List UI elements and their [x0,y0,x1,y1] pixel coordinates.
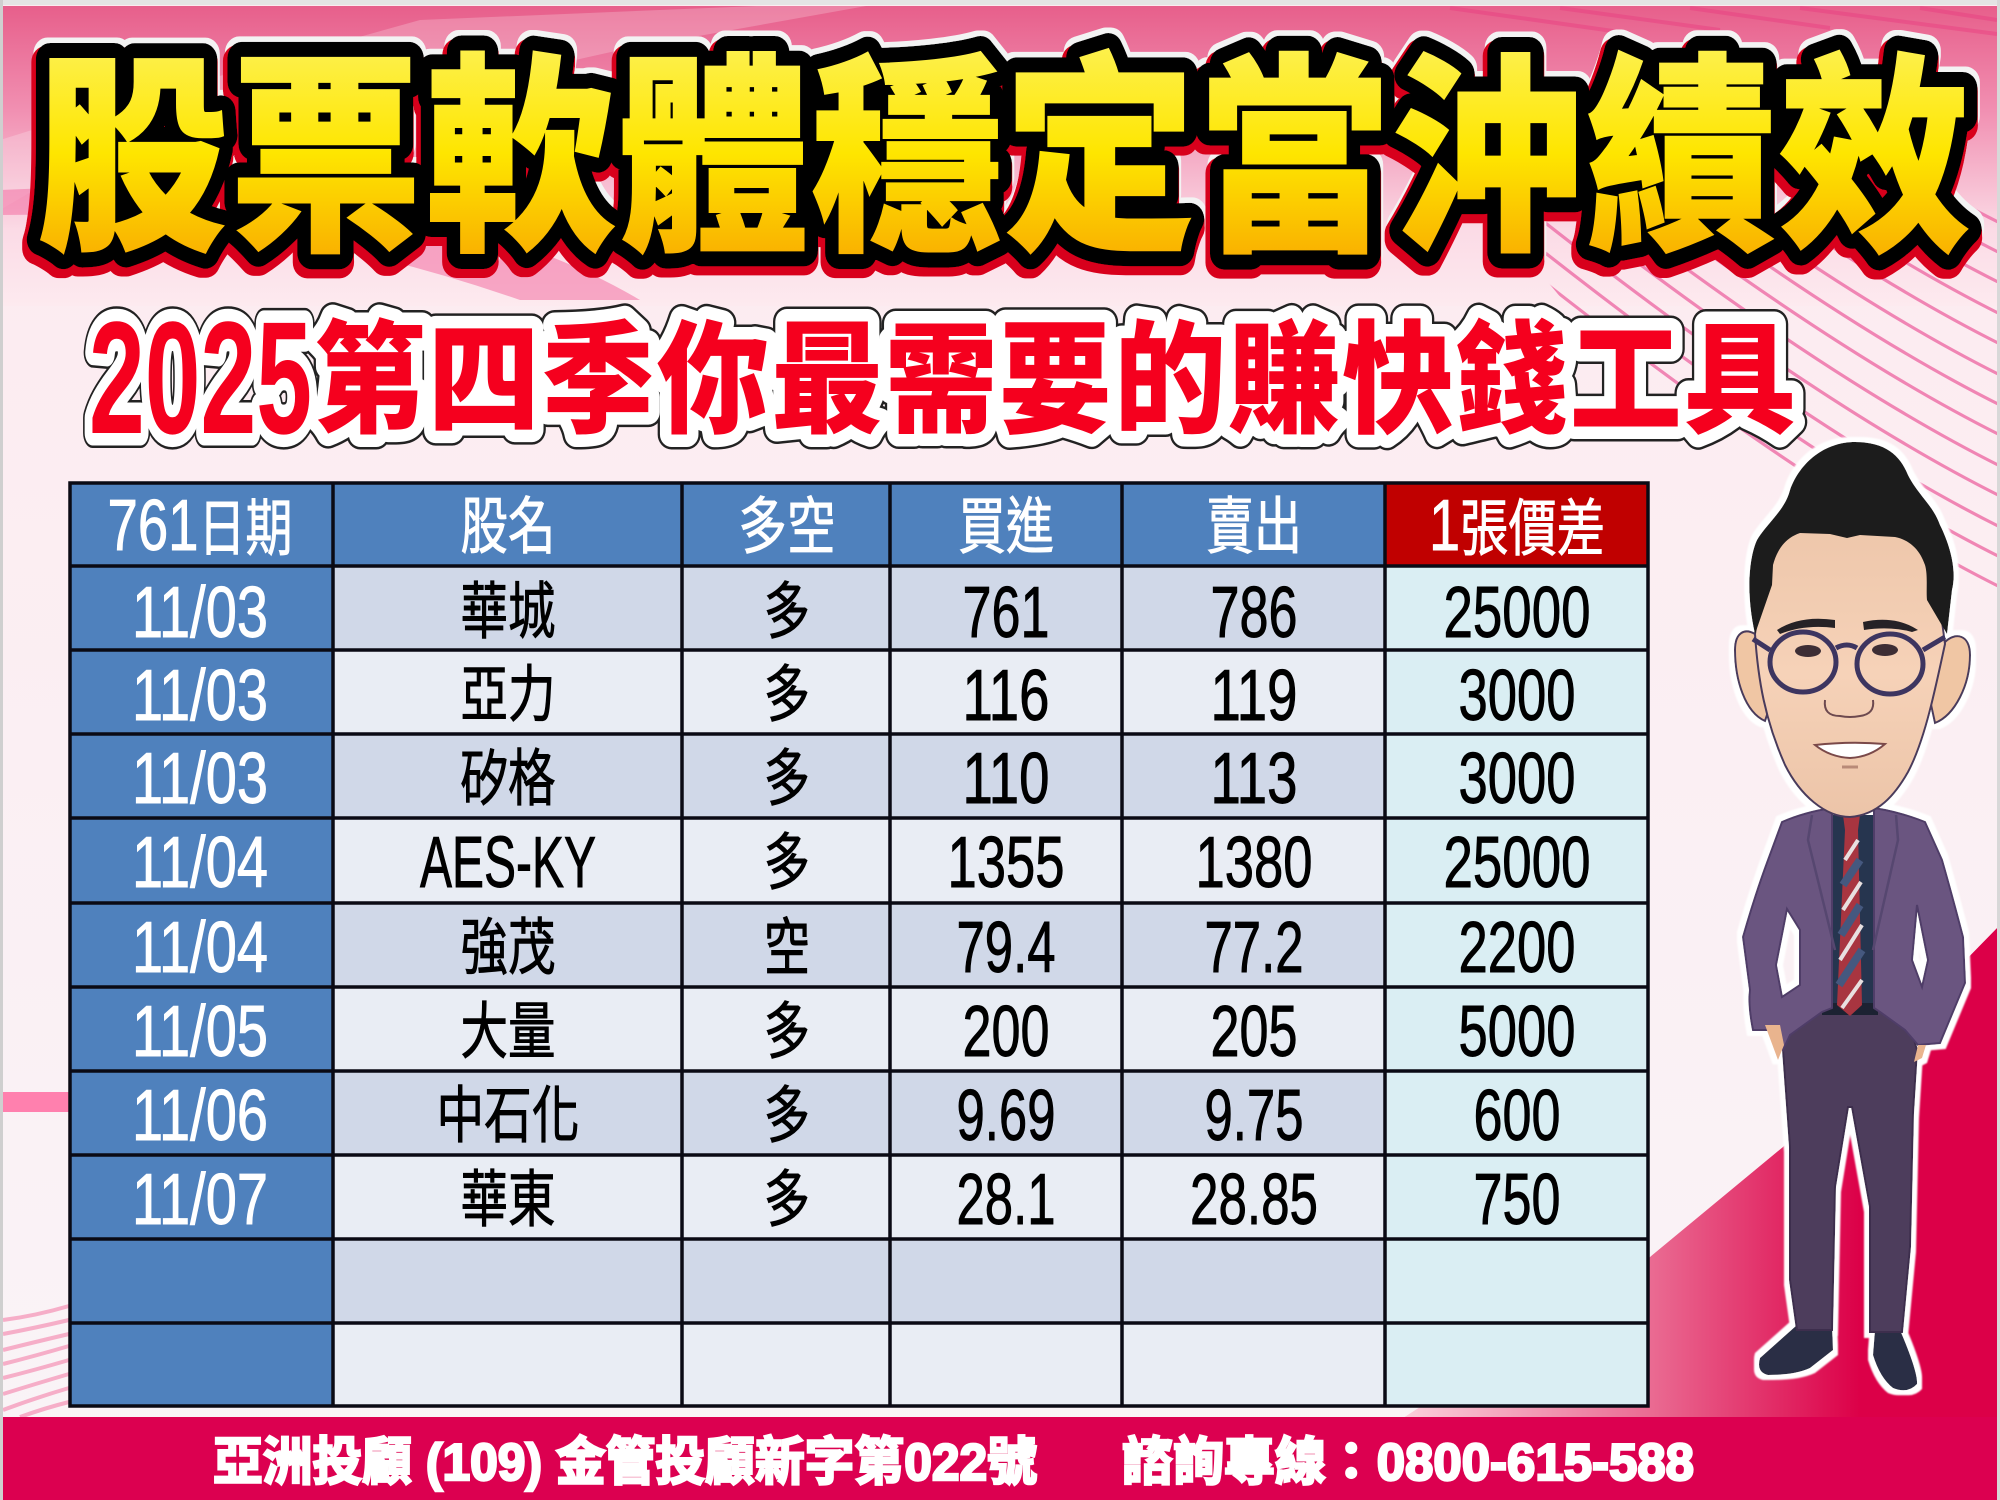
row 11/06 中石化: 600 [1474,1076,1560,1156]
row 11/06 中石化: 11/06 [132,1076,268,1156]
table header row: 1張價差 [1429,478,1605,568]
row 11/04 強茂: 11/04 [132,908,268,988]
subtitle: 2025第四季你最需要的賺快錢工具: 第四季你最需要的賺快錢工具 [314,281,1796,458]
row 11/07 華東: 28.85 [1190,1160,1318,1240]
row 11/03 矽格: 矽格 [460,728,556,818]
mascot: cartoon man in purple suit [1735,442,1970,1390]
table header row: 多空 [738,476,836,566]
row 11/03 華城: 786 [1210,573,1298,653]
row 11/04 AES-KY: 多 [764,812,810,902]
row 11/05 大量: 5000 [1458,992,1576,1072]
row 11/05 大量: 11/05 [132,992,268,1072]
eyes [1795,644,1898,657]
row 11/03 華城 [132,561,1590,653]
row 11/05 大量: 大量 [460,981,556,1071]
row 11/03 華城: 華城 [460,561,556,651]
table cell fills [69,482,1649,1407]
shoes [1759,1325,1917,1390]
row 11/03 亞力: 116 [962,656,1050,736]
shirt and belt [1822,815,1878,1015]
ears [1735,631,1970,723]
row 11/06 中石化 [132,1065,1560,1156]
nose [1825,700,1873,717]
row 11/06 中石化: 9.75 [1204,1076,1304,1156]
glasses [1753,632,1945,694]
row 11/03 亞力: 11/03 [132,656,268,736]
row 11/04 強茂: 77.2 [1204,908,1304,988]
row 11/07 華東: 750 [1474,1160,1560,1240]
row 11/03 亞力: 3000 [1458,656,1576,736]
subtitle: 2025第四季你最需要的賺快錢工具: 第四季你最需要的賺快錢工具 [314,281,1796,458]
row 11/03 華城: 25000 [1444,573,1590,653]
jacket [1743,808,1965,1050]
row 11/06 中石化: 中石化 [436,1065,580,1155]
row 11/03 矽格: 3000 [1458,739,1576,819]
face [1755,530,1945,817]
row 11/03 矽格: 110 [962,739,1050,819]
row 11/04 強茂: 79.4 [956,908,1056,988]
row 11/07 華東 [132,1149,1560,1240]
eyebrows [1777,619,1918,634]
row 11/07 華東: 28.1 [956,1160,1056,1240]
table header row [108,476,1605,568]
subtitle: 2025第四季你最需要的賺快錢工具: 2025 [89,288,312,467]
row 11/03 華城: 11/03 [132,573,268,653]
hands [1765,1025,1926,1062]
table header row: 賣出 [1206,476,1302,566]
footer text: hotline: 諮詢專線：0800-615-588 [1122,1434,1694,1492]
row 11/04 強茂: 空 [764,897,810,987]
row 11/05 大量: 205 [1210,992,1298,1072]
row 11/04 強茂 [132,897,1576,988]
hair [1749,442,1954,634]
table panel [69,476,1649,1407]
row 11/04 強茂: 強茂 [460,897,556,987]
necktie [1837,815,1862,1016]
row 11/04 AES-KY: 11/04 [132,823,268,903]
trousers [1783,1008,1917,1332]
row 11/03 矽格: 113 [1210,739,1298,819]
row 11/04 AES-KY: 25000 [1444,823,1590,903]
table header row: 股名 [460,476,556,566]
row 11/05 大量 [132,981,1576,1072]
row 11/04 強茂: 2200 [1458,908,1576,988]
row 11/03 亞力: 119 [1210,656,1298,736]
subtitle: 2025第四季你最需要的賺快錢工具: 2025 [89,288,312,467]
row 11/06 中石化: 多 [764,1065,810,1155]
row 11/07 華東: 多 [764,1149,810,1239]
row 11/03 亞力 [132,644,1576,736]
row 11/07 華東: 11/07 [132,1160,268,1240]
row 11/03 矽格 [132,728,1576,819]
row 11/04 AES-KY: AES-KY [420,823,596,903]
subtitle: 2025第四季你最需要的賺快錢工具: 第四季你最需要的賺快錢工具 [314,281,1796,458]
row 11/04 AES-KY: 1380 [1196,823,1312,903]
table header row: 買進 [958,476,1054,566]
row 11/05 大量: 200 [962,992,1050,1072]
row 11/04 AES-KY [132,812,1590,903]
row 11/05 大量: 多 [764,981,810,1071]
lapels [1808,815,1898,950]
row 11/03 華城: 多 [764,561,810,651]
row 11/03 華城: 761 [962,573,1050,653]
row 11/03 矽格: 11/03 [132,739,268,819]
row 11/03 亞力: 亞力 [460,644,556,734]
row 11/07 華東: 華東 [460,1149,556,1239]
row 11/04 AES-KY: 1355 [948,823,1064,903]
table header row: 761日期 [108,478,292,568]
subtitle: 2025第四季你最需要的賺快錢工具: 2025 [89,288,312,467]
mouth [1815,743,1885,767]
row 11/03 矽格: 多 [764,728,810,818]
footer banner [3,1417,1997,1500]
row 11/06 中石化: 9.69 [956,1076,1056,1156]
row 11/03 亞力: 多 [764,644,810,734]
footer text: license number: 亞洲投顧 (109) 金管投顧新字第022號 [213,1434,1037,1492]
